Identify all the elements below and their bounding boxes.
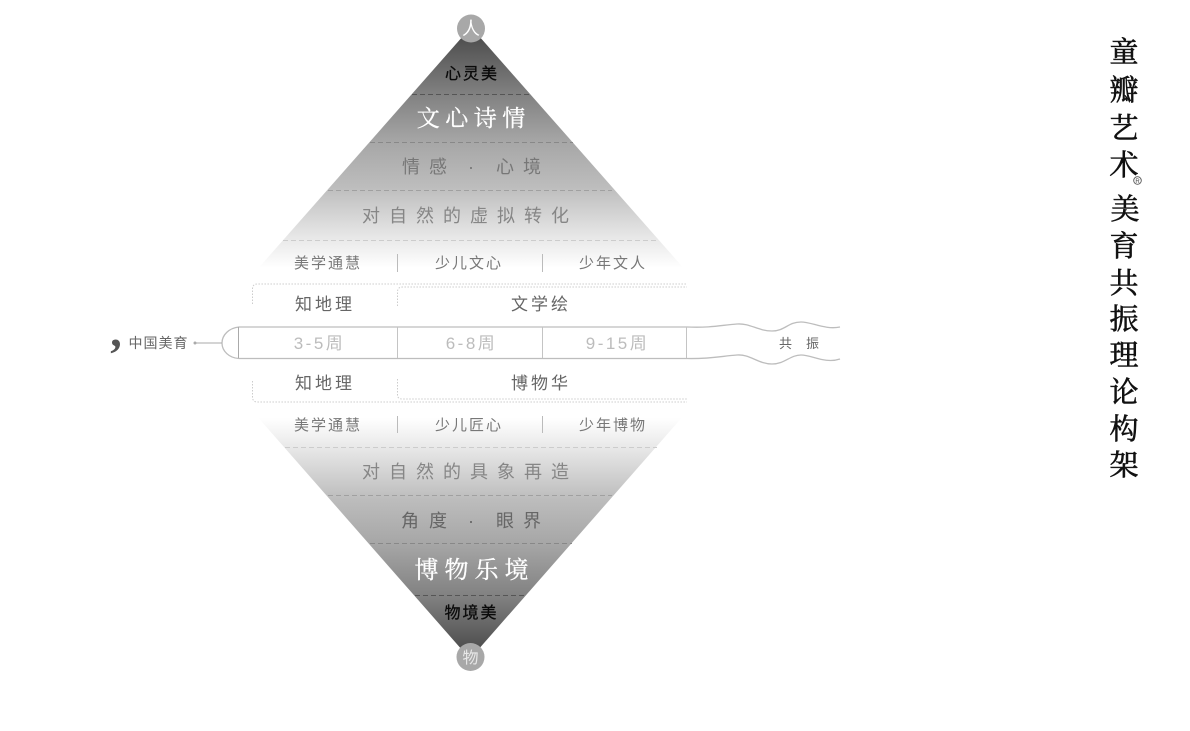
lower pyramid labels	[362, 462, 578, 622]
vertical title: 艺	[1109, 112, 1139, 145]
lower pyramid labels: 角度·眼界	[401, 511, 541, 531]
lower tier row: 少儿匠心	[435, 417, 503, 434]
lower course frame: 知地理 / 博物华: 博物华	[511, 374, 571, 393]
upper pyramid labels: 情感·心境	[402, 157, 541, 177]
upper tier row: 美学通慧	[294, 255, 362, 272]
vertical title: 育	[1109, 230, 1139, 263]
vertical title: 构	[1109, 413, 1139, 446]
upper pyramid labels: 对自然的虚拟转化	[362, 206, 578, 226]
upper pyramid labels: 文心诗情	[417, 106, 531, 131]
lower tier row: 少年博物	[579, 417, 647, 434]
vertical title: 架	[1109, 449, 1139, 482]
lower tier row: 美学通慧	[294, 417, 362, 434]
lower tier row	[294, 416, 647, 434]
apex circle: 物: 物	[462, 649, 479, 667]
upper course frame: 知地理 / 文学绘: 知地理	[295, 295, 355, 314]
left label: 中国美育: 中国美育	[128, 335, 188, 351]
upper pyramid labels	[362, 65, 578, 226]
lower pyramid labels: 博物乐境	[414, 557, 534, 584]
vertical title: 理	[1109, 340, 1139, 372]
timeline bar: 9-15周	[586, 334, 649, 353]
lower pyramid	[255, 414, 685, 659]
vertical title: 振	[1109, 303, 1139, 336]
vertical title: 共	[1109, 267, 1139, 300]
upper course frame: 知地理 / 文学绘: 文学绘	[511, 295, 571, 314]
apex circle: 物	[456, 643, 484, 671]
lower pyramid labels: 物境美	[444, 603, 499, 622]
vertical title: 童	[1109, 36, 1139, 69]
left label: 中国美育	[110, 305, 222, 356]
timeline bar: 6-8周	[446, 334, 497, 353]
apex circle: 人	[457, 14, 485, 42]
vertical title: 瓣	[1109, 74, 1139, 107]
apex circle: 人: 人	[462, 19, 480, 39]
timeline bar	[222, 322, 840, 364]
vertical title: 美	[1110, 193, 1140, 226]
timeline bar: 3-5周	[294, 334, 345, 353]
upper course frame: 知地理 / 文学绘	[252, 284, 687, 314]
vertical title: 论	[1109, 376, 1139, 409]
timeline bar: 共振	[779, 336, 833, 351]
upper pyramid labels: 心灵美	[445, 65, 499, 83]
upper tier row: 少儿文心	[435, 255, 503, 272]
left label: 中国美育: ,	[110, 305, 122, 356]
vertical title: 术	[1109, 149, 1139, 182]
lower pyramid labels: 对自然的具象再造	[362, 462, 578, 482]
lower course frame: 知地理 / 博物华	[252, 374, 687, 402]
upper tier row	[294, 254, 647, 272]
vertical title	[1109, 36, 1141, 482]
vertical title: R	[1135, 179, 1140, 185]
upper pyramid	[255, 27, 687, 272]
upper tier row: 少年文人	[579, 255, 647, 272]
lower course frame: 知地理 / 博物华: 知地理	[295, 374, 355, 393]
